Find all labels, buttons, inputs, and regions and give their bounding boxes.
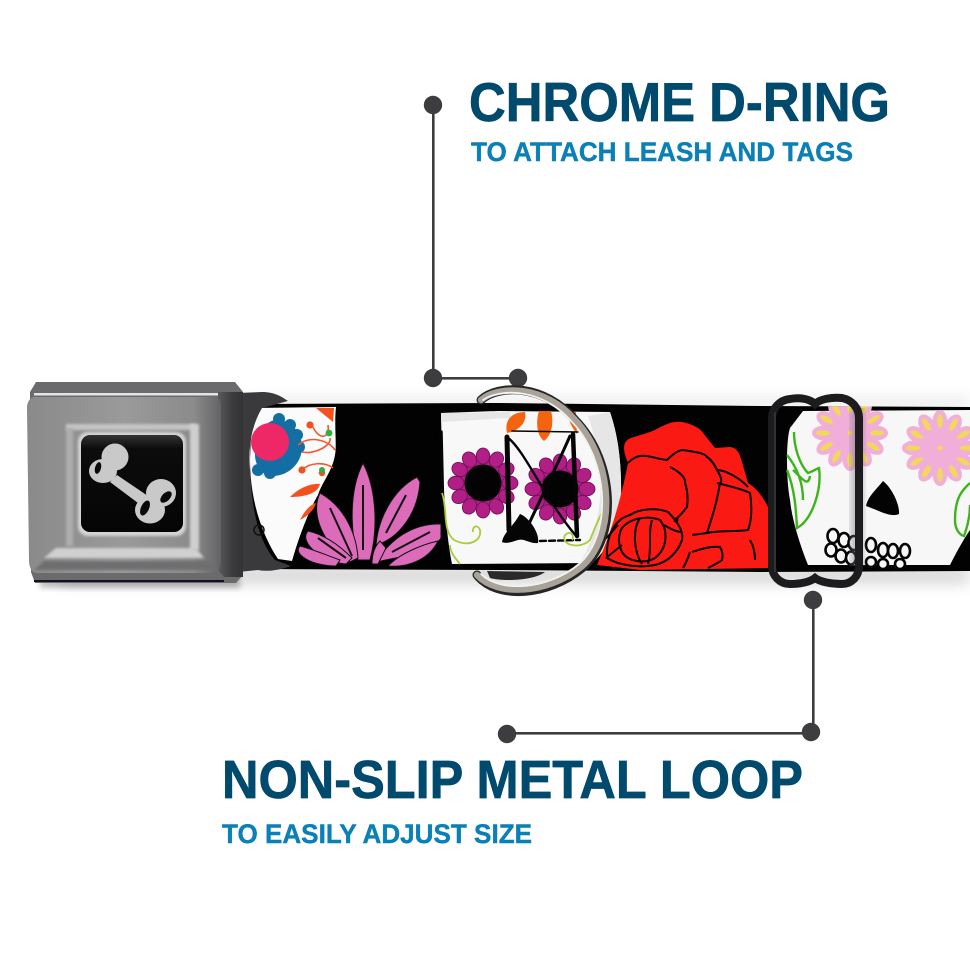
seatbelt buckle [27,382,291,588]
callout line: d-ring [424,96,527,387]
callout line: loop [498,591,822,743]
chrome d-ring [477,390,607,592]
nose [502,514,538,543]
teeth [826,529,910,569]
nose [866,481,899,515]
infographic canvas [27,82,970,844]
ring underside pad [487,571,545,580]
back plate lower edge [34,580,224,582]
loop shadow band [849,408,867,566]
buckle back plate [30,382,243,583]
square recess [78,432,186,536]
skull three [787,395,970,569]
right eye flower [525,454,595,524]
strap shadow [60,398,970,582]
metal adjustment loop [772,398,859,584]
left bevel highlight [66,428,73,546]
vines [442,493,610,564]
flower right eye [902,410,970,486]
left eye flower [448,448,518,518]
pink flower [298,463,441,566]
face linework [441,431,580,541]
icon: bone [89,444,176,524]
lower plate shade [34,561,218,570]
subtitle: to easily adjust size: TO EASILY ADJUST SIZE [222,819,532,849]
buckle drop shadow [40,576,240,588]
black bone badge [81,435,183,532]
flower left eye [812,406,888,471]
buckle side [218,392,243,577]
bottom bevel highlight [44,548,204,558]
back plate highlight [34,393,220,396]
green leaves [787,432,970,536]
rivet [254,525,264,535]
collar strap with sugar skull print [250,395,970,572]
buckle strap connector [238,392,291,572]
red flower [597,422,768,570]
front plate [27,397,221,573]
small rose [607,509,682,566]
skull two [441,411,621,564]
subtitle: to attach leash and tags: TO ATTACH LEASH AND TAGS [471,137,853,167]
skull one [250,407,336,561]
petal veins [318,485,430,558]
title: chrome d-ring: CHROME D-RING [469,71,890,133]
title: non-slip metal loop: NON-SLIP METAL LOOP [222,750,803,810]
orange petals [506,411,577,441]
top bevel highlight [66,424,196,430]
right bevel highlight [190,424,199,550]
